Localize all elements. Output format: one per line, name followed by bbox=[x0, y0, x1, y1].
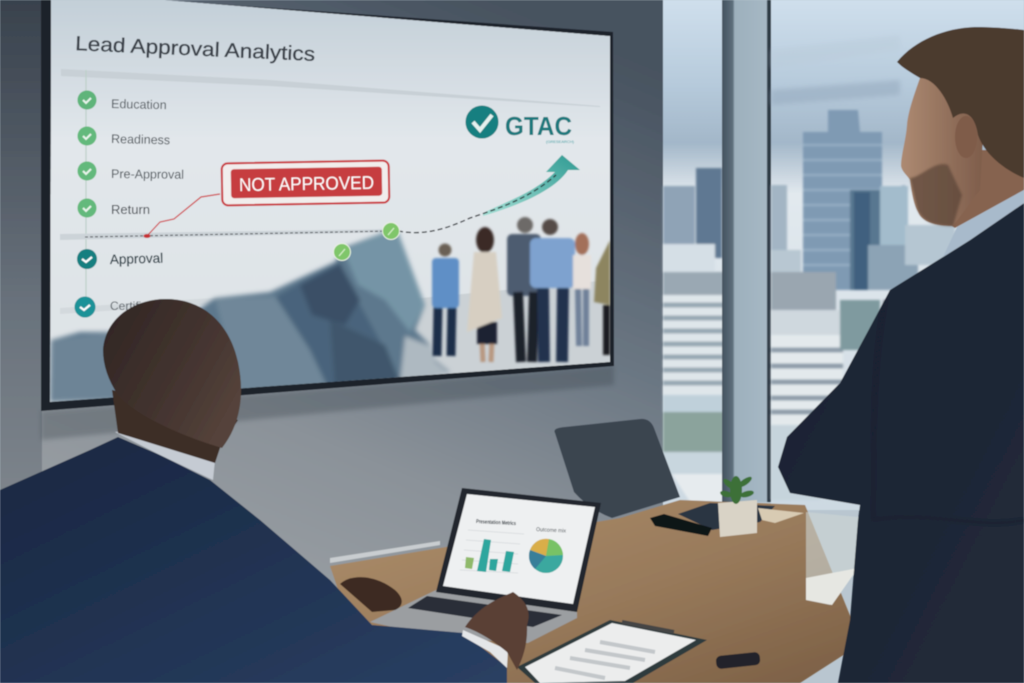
mountain bbox=[50, 232, 450, 402]
step: Readiness: Readiness bbox=[111, 132, 170, 147]
logo: GTAC: (GRESEARCH) bbox=[546, 139, 575, 144]
table bbox=[330, 500, 860, 683]
milestone marker upper bbox=[382, 222, 400, 240]
screen heading: Presentation Metrics bbox=[476, 519, 516, 527]
collar bbox=[943, 190, 1024, 257]
milestone marker lower bbox=[334, 244, 350, 260]
ear bbox=[955, 116, 977, 158]
keyboard bbox=[408, 596, 562, 627]
tablet and phone on table bbox=[650, 503, 775, 536]
step: Return: Return bbox=[111, 202, 150, 217]
left man neck bbox=[112, 390, 238, 463]
red callout connector bbox=[144, 194, 220, 238]
bar chart bbox=[460, 530, 524, 573]
chair bbox=[554, 419, 680, 518]
right man bbox=[778, 27, 1024, 683]
growth arrow bbox=[483, 155, 580, 216]
pie heading: Outcome mix bbox=[536, 527, 566, 535]
left man head bbox=[103, 299, 241, 448]
laptop lid bbox=[436, 488, 601, 612]
television frame bbox=[41, 0, 614, 411]
left hand bbox=[340, 577, 402, 612]
logo: GTAC: GTAC bbox=[505, 111, 572, 141]
laptop screen bbox=[443, 494, 595, 604]
television screen bbox=[50, 0, 610, 402]
left man suit bbox=[0, 437, 507, 683]
suit bbox=[778, 203, 1024, 683]
step: Return bbox=[78, 198, 150, 218]
step: Approval bbox=[77, 249, 163, 269]
face bbox=[901, 70, 985, 226]
acrylic stand bbox=[806, 512, 858, 605]
person 1 bbox=[432, 244, 459, 356]
divider lower bbox=[60, 298, 212, 314]
step: Readiness bbox=[78, 126, 170, 147]
baseboard line bbox=[330, 541, 440, 563]
logo: GTAC bbox=[466, 106, 575, 144]
right hand bbox=[465, 592, 529, 670]
window mullion bbox=[722, 0, 771, 502]
dashed baseline bbox=[60, 229, 400, 240]
laptop base bbox=[370, 590, 577, 643]
backdrop behind people bbox=[400, 280, 610, 376]
divider under heading bbox=[61, 69, 600, 107]
step: Pre-Approval bbox=[78, 162, 184, 182]
notebook bbox=[758, 508, 804, 523]
step: Education: Education bbox=[111, 97, 167, 112]
step: Certification bbox=[74, 296, 141, 318]
person 6 bbox=[594, 240, 610, 355]
step: Education bbox=[78, 90, 167, 112]
window: right pane with city bbox=[771, 0, 1024, 510]
hair bbox=[897, 27, 1024, 178]
left man cuff bbox=[462, 630, 508, 668]
heading: Lead Approval Analytics: Lead Approval Analytics bbox=[75, 33, 316, 66]
suit sleeve crease bbox=[873, 300, 1024, 523]
beard bbox=[910, 164, 962, 226]
plant bbox=[718, 475, 757, 537]
laptop bbox=[370, 488, 601, 643]
person 4 bbox=[530, 219, 575, 362]
dashed growth path bbox=[398, 175, 556, 233]
wall bbox=[0, 0, 664, 683]
step: Certification: Certification bbox=[110, 299, 173, 313]
people group on screen bbox=[432, 217, 610, 362]
callout: NOT APPROVED bbox=[222, 161, 389, 205]
window: left pane with city bbox=[663, 0, 723, 510]
neck bbox=[925, 150, 1024, 228]
person 2 bbox=[467, 227, 502, 362]
clipboard bbox=[517, 620, 707, 683]
left man shirt collar bbox=[115, 430, 215, 480]
pie chart bbox=[529, 539, 563, 573]
left man bbox=[0, 299, 529, 683]
person 3 bbox=[507, 217, 541, 362]
timeline rail bbox=[85, 70, 87, 300]
person 5 bbox=[573, 233, 591, 346]
step: Pre-Approval: Pre-Approval bbox=[111, 167, 184, 182]
step: Approval: Approval bbox=[110, 251, 163, 267]
phone on table bbox=[715, 652, 761, 669]
callout: NOT APPROVED: NOT APPROVED bbox=[239, 172, 374, 195]
